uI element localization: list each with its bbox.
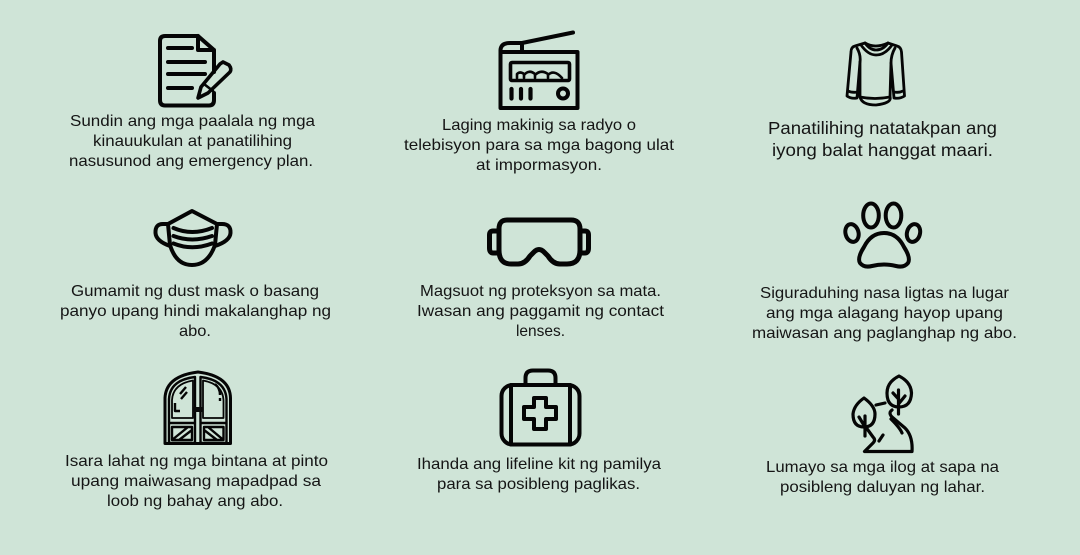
text: follow emergency plan [69, 113, 315, 170]
text: close windows and doors: loob ng bahay ang abo. [107, 493, 283, 510]
panel: cover skin [768, 43, 997, 160]
text: dust mask [60, 283, 331, 340]
icon: trees and river [853, 376, 912, 452]
panel: eye protection [417, 220, 665, 340]
text: lifeline kit [417, 456, 661, 493]
text: listen to radio [404, 117, 675, 174]
text: eye protection [417, 283, 665, 340]
icon: goggles [490, 220, 588, 264]
icon: arched door [165, 372, 230, 444]
panel: lifeline kit [417, 370, 661, 493]
icon: radio [500, 32, 578, 108]
text: dust mask: Gumamit ng dust mask o basang [71, 283, 319, 300]
text: close windows and doors: upang maiwasang mapadpad sa [71, 473, 321, 490]
panel: listen to radio [404, 32, 675, 174]
icon: face mask [155, 211, 231, 265]
text: avoid rivers: Lumayo sa mga ilog at sapa na [766, 459, 999, 476]
text: dust mask: panyo upang hindi makalanghap ng [60, 303, 331, 320]
text: avoid rivers [766, 459, 999, 496]
panel: pets safety [752, 204, 1017, 342]
icon: first aid kit [502, 370, 580, 444]
text: listen to radio: at impormasyon. [476, 157, 602, 174]
text: pets safety: ang mga alagang hayop upang [766, 305, 1003, 322]
text: eye protection: Magsuot ng proteksyon sa mata. [420, 283, 661, 300]
text: cover skin [768, 118, 997, 160]
text: listen to radio: Laging makinig sa radyo o [442, 117, 636, 134]
panel: close windows and doors [65, 372, 328, 510]
icon: document and pencil [160, 36, 231, 106]
panel: avoid rivers [766, 376, 999, 496]
text: follow emergency plan: kinauukulan at panatilihing [93, 133, 292, 150]
text: eye protection: Iwasan ang paggamit ng contact [417, 303, 665, 320]
text: cover skin: iyong balat hanggat maari. [772, 140, 993, 160]
text: dust mask: abo. [179, 323, 211, 340]
text: follow emergency plan: Sundin ang mga paalala ng mga [70, 113, 315, 130]
panel: dust mask [60, 211, 331, 340]
icon: paw print [843, 204, 922, 267]
text: lifeline kit: Ihanda ang lifeline kit ng pamilya [417, 456, 661, 473]
text: lifeline kit: para sa posibleng paglikas. [437, 476, 640, 493]
text: eye protection: lenses. [516, 323, 565, 340]
icon: long sleeve shirt [847, 43, 904, 105]
text: pets safety: maiwasan ang paglanghap ng abo. [752, 325, 1017, 342]
text: pets safety: Siguraduhing nasa ligtas na lugar [760, 285, 1010, 302]
text: follow emergency plan: nasusunod ang emergency plan. [69, 153, 313, 170]
text: close windows and doors: Isara lahat ng mga bintana at pinto [65, 453, 328, 470]
text: cover skin: Panatilihing natatakpan ang [768, 118, 997, 138]
text: avoid rivers: posibleng daluyan ng lahar. [780, 479, 985, 496]
panel: follow emergency plan [69, 36, 315, 170]
text: pets safety [752, 285, 1017, 342]
text: listen to radio: telebisyon para sa mga bagong ulat [404, 137, 675, 154]
text: close windows and doors [65, 453, 328, 510]
